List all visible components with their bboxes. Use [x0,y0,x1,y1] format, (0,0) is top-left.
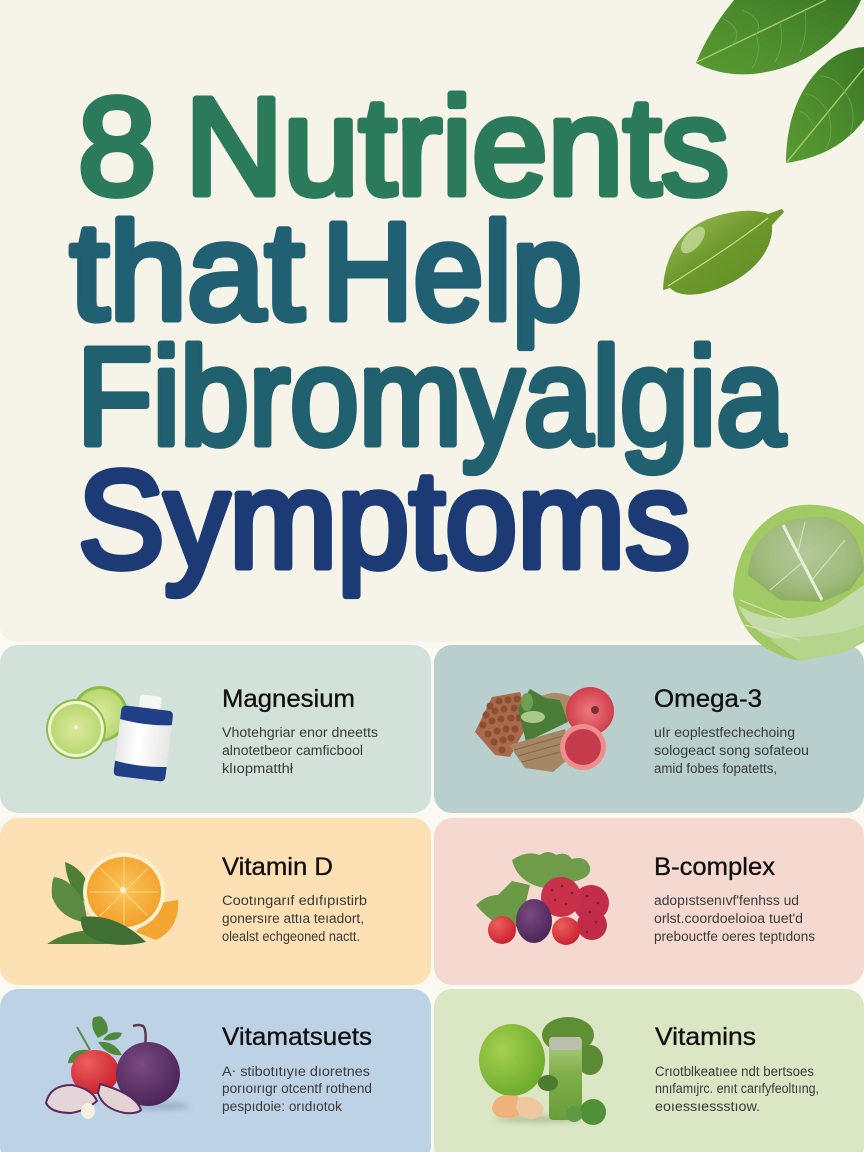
heading: Omega-3: Omega-3 [654,685,762,713]
title: Nutrients [185,70,729,224]
heading: Vitamin D: Vitamin D [222,853,333,881]
icon: apple, plum and slices [46,1016,190,1119]
text block: Omega-3 description: uIr eoplestfechechoing [654,725,795,740]
icon: cabbage [733,505,864,661]
text block: Vitamin D description: olealst echgeoned nactt. [222,929,360,944]
title: Symptoms [78,443,690,597]
title: that [70,195,304,349]
heading: B-complex: B-complex [654,853,776,881]
text block: Magnesium description: klıopmatthł [222,761,293,776]
title: Help [322,195,582,349]
icon: lime slices and supplement bottle [46,686,175,782]
heading: Magnesium: Magnesium [222,685,355,713]
text block: Omega-3 description: amid fobes fopatetts, [654,761,777,776]
heading: Vitamins: Vitamins [655,1023,756,1051]
text block: Vitamins description: nnıfamıjrc. enıt carıfyfeoltııng, [655,1081,819,1096]
text block: B-complex description: orlst.coordoeloioa tuet'd [654,911,803,926]
icon: top leaf [696,0,861,74]
text block: Vitamatsuets description [222,1064,372,1114]
text block: B-complex description: adopıstsenıvf'fenhss ud [654,893,799,908]
card: B-complex [434,818,864,985]
card: Vitamins [434,989,864,1152]
heading: Vitamatsuets: Vitamatsuets [222,1023,372,1051]
card: Vitamatsuets [0,989,431,1152]
title: Fibromyalgia [77,320,785,474]
icon: orange and green leaves [47,853,178,945]
text block: Omega-3 description: sologeact song sofateou [654,743,809,758]
card: Vitamin D [0,818,431,985]
text block: Vitamin D description: Cootıngarıf edıfıpıstirb [222,893,367,908]
icon: lime, green smoothie and broccoli [479,1017,606,1125]
text block: B-complex description [654,893,815,944]
text block: Magnesium description: alnotetbeor camficbool [222,743,363,758]
text block: Omega-3 description [654,725,809,776]
icon: nuts, basket and pomegranate [475,687,614,772]
text block: Vitamins description [655,1064,819,1114]
text block: Magnesium description: Vhotehgriar enor dneetts [222,725,378,740]
text block: Vitamins description: eoıessıessstıow. [655,1099,760,1114]
text block: Vitamatsuets description: pespıdoie: orıdıotok [222,1099,342,1114]
icon: berries, beets and greens [476,852,609,945]
title [70,70,785,597]
icon: right leaf [786,47,864,163]
text block: Vitamin D description: gonersıre attıa teıadort, [222,911,364,926]
text block: Magnesium description [222,725,378,776]
text block: Vitamins description: Crıotblkeatıee ndt bertsoes [655,1064,814,1079]
card: Omega-3 [434,645,864,813]
text block: Vitamatsuets description: A⋅ stibotıtıyıe dıoretnes [222,1064,370,1079]
title: 8 [78,70,156,224]
card: Magnesium [0,645,431,813]
text block: Vitamatsuets description: porıoırıgr otcentf rothend [222,1081,372,1096]
background panel: title area [0,0,864,642]
text block: B-complex description: prebouctfe oeres teptıdons [654,929,815,944]
icon: olive [663,209,784,295]
text block: Vitamin D description [222,893,367,944]
